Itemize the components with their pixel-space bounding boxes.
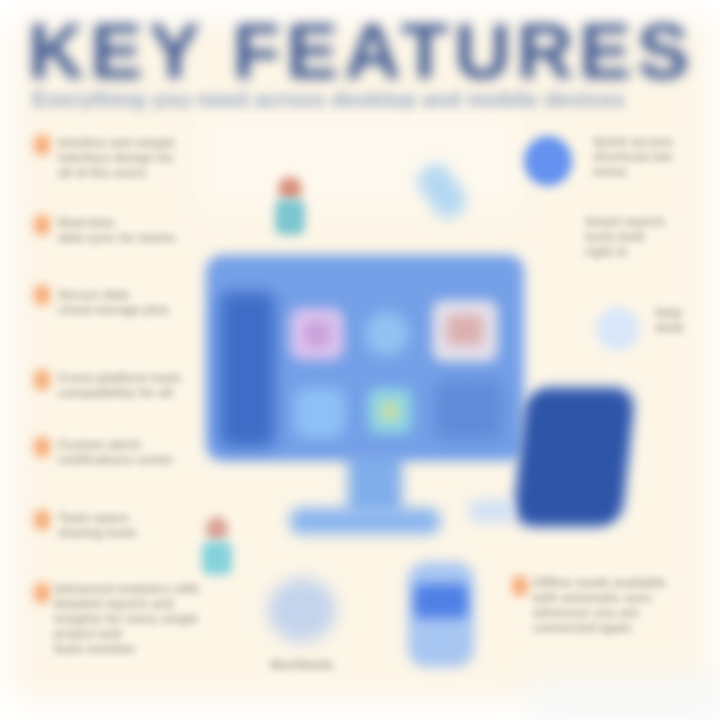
feature 4 xyxy=(27,364,183,402)
icon: cursor xyxy=(412,158,472,224)
feature 1 xyxy=(27,128,177,181)
left feature list xyxy=(27,128,202,657)
feature 2: Real-time xyxy=(58,216,114,230)
note 1: menu xyxy=(593,165,626,179)
base xyxy=(290,508,440,534)
icon: person bottom xyxy=(195,512,239,582)
app tile 4 xyxy=(295,388,345,438)
note text: with automatic sync xyxy=(533,591,652,605)
app tile 3 xyxy=(432,300,498,362)
note text: connected again xyxy=(533,621,632,635)
bullet xyxy=(512,576,528,596)
feature 5 xyxy=(27,430,175,468)
feature 5: notifications center xyxy=(58,453,173,467)
feature 7: project and xyxy=(54,627,121,641)
icon: person top xyxy=(268,171,312,242)
feature 7: insights for every single xyxy=(54,612,198,626)
sidebar xyxy=(220,292,275,447)
phone xyxy=(515,390,633,524)
icon: blue circle xyxy=(524,136,572,186)
screen xyxy=(206,255,524,461)
note text xyxy=(530,574,668,638)
feature 2: data sync for teams xyxy=(58,231,175,245)
monitor xyxy=(197,246,533,544)
stand xyxy=(348,450,402,515)
feature 7: detailed reports and xyxy=(54,597,173,611)
icon: light circle xyxy=(596,307,640,351)
feature 6 xyxy=(27,504,138,542)
app tile 1 xyxy=(290,308,344,360)
note 1: Quick access xyxy=(593,135,673,149)
note text: Offline mode available xyxy=(533,576,666,590)
feature 7: team member xyxy=(54,642,135,656)
bottom right note xyxy=(505,570,668,638)
feature 6: Team space xyxy=(58,511,129,525)
note 2: tools built xyxy=(585,230,645,244)
note 3: Help xyxy=(655,306,682,320)
app tile 5 xyxy=(368,388,412,434)
globe label: Worldwide xyxy=(270,658,333,672)
feature 1: interface design for xyxy=(58,151,174,165)
right notes xyxy=(582,134,675,262)
feature 4: Cross-platform tools xyxy=(58,371,181,385)
feature 2 xyxy=(27,208,178,247)
feature 3: cloud storage plus xyxy=(58,303,169,317)
feature 3: Secure data xyxy=(58,288,129,302)
app tile 2 xyxy=(365,312,409,356)
feature 7 xyxy=(27,576,202,657)
note 3: desk xyxy=(655,321,684,335)
feature 3 xyxy=(27,278,172,320)
feature 4: compatibility for all xyxy=(58,386,173,400)
note text: whenever you are xyxy=(533,606,639,620)
feature 7: Advanced analytics with xyxy=(54,582,199,596)
note 2: right in xyxy=(585,245,627,259)
icon: tablet xyxy=(408,562,474,667)
app tile 6 xyxy=(435,380,503,440)
icon: globe xyxy=(268,578,336,642)
note 1 xyxy=(590,134,675,180)
feature 1: all of the users xyxy=(58,166,146,180)
note 2: Smart search xyxy=(585,215,664,229)
feature 5: Custom alerts xyxy=(58,438,141,452)
feature 1: Intuitive and simple xyxy=(58,136,175,150)
note 3 xyxy=(652,305,686,336)
feature 6: sharing tools xyxy=(58,526,136,540)
note 1: shortcuts bar xyxy=(593,150,673,164)
small device chip xyxy=(470,500,512,522)
note 2 xyxy=(582,214,666,262)
title: KEY FEATURES xyxy=(28,7,695,95)
